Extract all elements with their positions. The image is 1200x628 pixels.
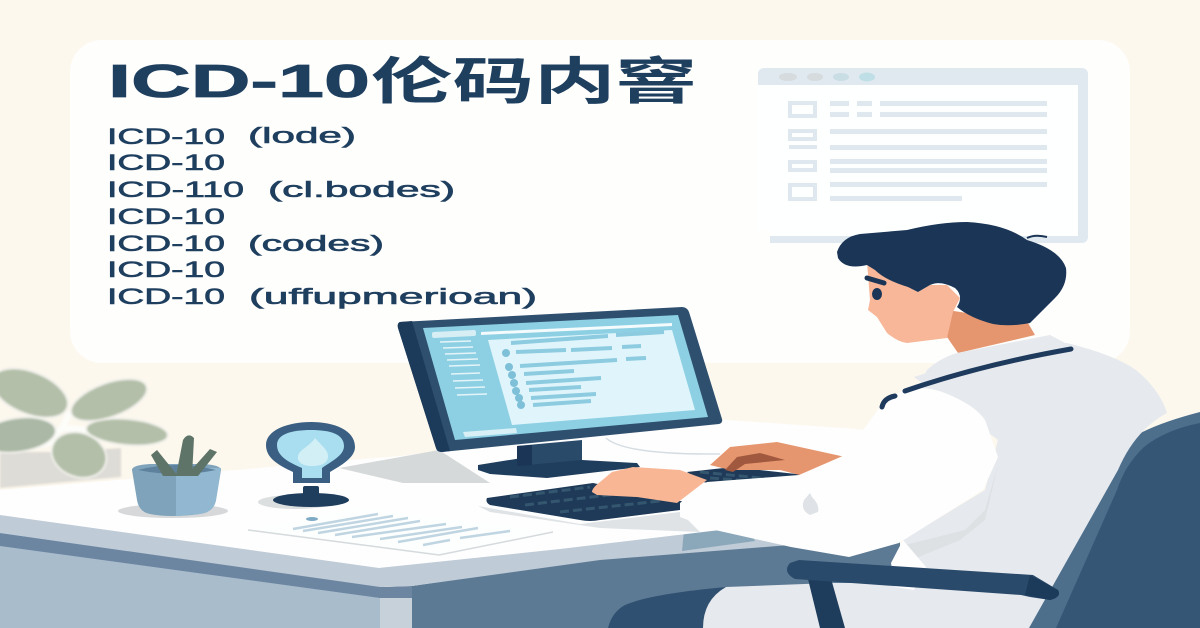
text block: code list: ICD-10 <box>107 284 225 309</box>
keyboard <box>486 467 823 521</box>
cable <box>606 438 720 454</box>
desk corner edge <box>380 598 413 628</box>
title: 伦码内窨 <box>371 54 697 110</box>
desk front shadow strip <box>0 533 412 598</box>
text block: code list <box>107 123 537 309</box>
torso <box>703 343 1167 628</box>
desk front edge <box>0 512 790 587</box>
text block: code list: ICD-10 <box>107 124 225 149</box>
torso shadow <box>899 465 998 565</box>
title: ICD-10 <box>108 55 370 107</box>
lanyard hook <box>882 396 895 407</box>
plant pot with succulent <box>118 435 228 518</box>
text block: code list: (uffupmerioan) <box>249 284 537 309</box>
person <box>592 222 1200 628</box>
text block: code list: ICD-10 <box>107 204 225 229</box>
sleeve fold <box>803 493 818 515</box>
monitor shadow on desk <box>339 450 490 483</box>
hair <box>837 222 1066 325</box>
text block: code list: (cl.bodes) <box>268 177 455 202</box>
arm: white sleeve <box>680 388 998 557</box>
chair seat <box>608 587 760 628</box>
armrest <box>787 560 1059 628</box>
desk top <box>0 418 870 568</box>
face <box>867 262 960 343</box>
text block: code list: (codes) <box>248 231 384 256</box>
hair tuft <box>1027 236 1047 238</box>
lanyard <box>905 349 1071 391</box>
hand: back <box>710 442 850 482</box>
hand: front <box>592 467 707 503</box>
monitor <box>398 307 722 452</box>
background plant <box>0 359 169 488</box>
desk right under panel <box>412 530 900 628</box>
text block: code list: (lode) <box>248 123 356 148</box>
text block: code list: ICD-110 <box>107 177 244 202</box>
desk underside reflection <box>682 522 755 551</box>
title <box>108 54 697 110</box>
desk lower left panel <box>0 530 412 628</box>
hand: back thumb <box>725 453 785 472</box>
monitor stand <box>478 440 640 478</box>
keyboard shadow <box>478 506 700 532</box>
eyebrow <box>867 278 884 283</box>
paper document on desk <box>248 507 553 555</box>
chair backrest <box>1021 412 1200 628</box>
text block: code list: ICD-10 <box>107 150 225 175</box>
panel: main white card <box>70 40 1130 363</box>
coat tail <box>891 540 926 590</box>
icon: light bulb lamp <box>258 422 355 509</box>
background document window <box>758 68 1088 244</box>
eye <box>872 288 882 300</box>
text block: code list: ICD-10 <box>107 231 225 256</box>
shirt collar <box>914 335 1073 395</box>
text block: code list: ICD-10 <box>107 257 225 282</box>
neck <box>947 310 1035 353</box>
